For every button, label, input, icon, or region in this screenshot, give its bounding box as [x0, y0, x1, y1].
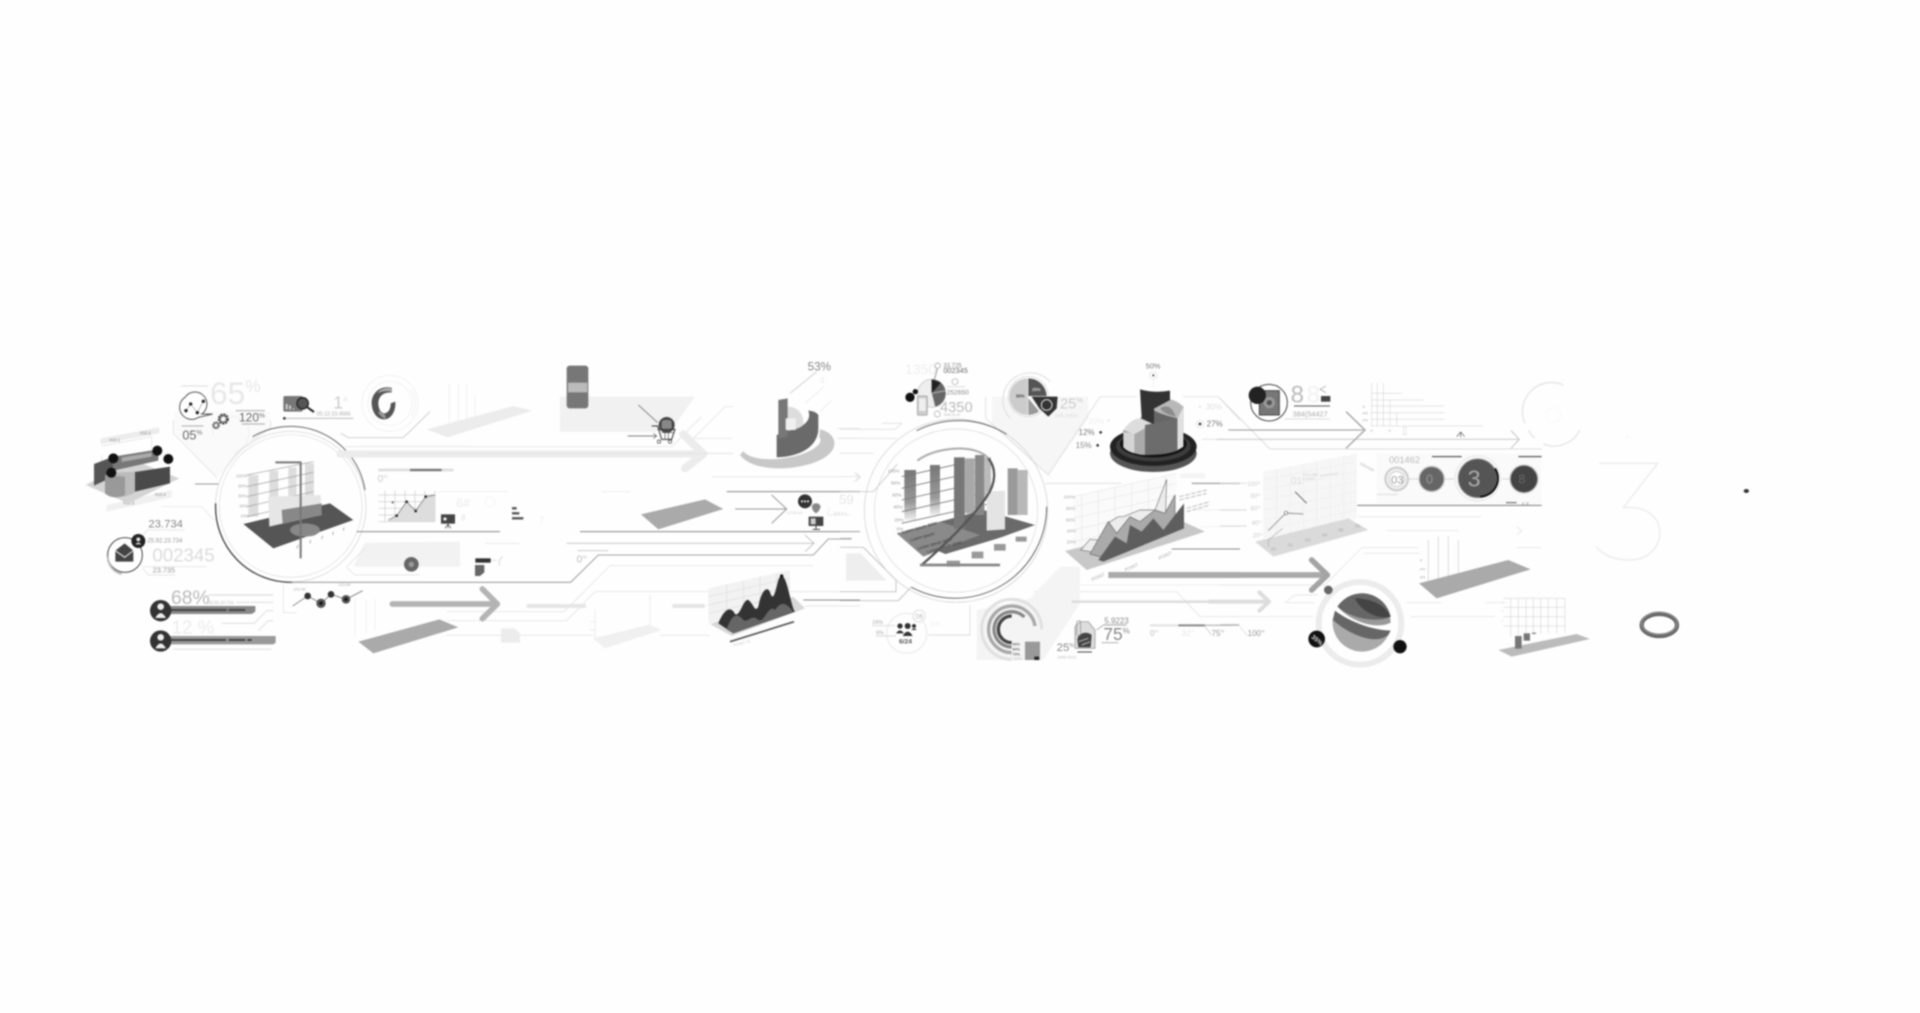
text: people counter 6/24: 24% [872, 620, 883, 626]
chart: user progress bar 12 percent [150, 611, 276, 652]
chart: 3D isometric cylinders: #10.3 [123, 501, 135, 506]
chart: 3D wall grid: 40 [1252, 521, 1258, 527]
chart: mountain area 3D [708, 570, 805, 648]
chart: 3D bars: 60% [892, 492, 902, 497]
icon: shopping cart [628, 405, 675, 443]
chart: 3D wall grid: 20 [1253, 533, 1259, 539]
arrow: connector lines centre [1033, 483, 1240, 617]
chart: 3D area chart: POINT [1091, 572, 1106, 582]
chart: 3D bars: 0% [897, 527, 903, 532]
text: 05 percent: 05 [182, 428, 196, 442]
panel: gauge background [977, 567, 1080, 660]
text: 120 percent: % [259, 412, 265, 419]
chart: dotted connector line: 123.90 [293, 587, 306, 592]
text: counter 23.734 with envelope icon: 25.92.23.734 [147, 539, 183, 545]
text: faint numbers: 8 [461, 514, 466, 523]
chart: 0 percent small [577, 551, 608, 566]
chart: radial gauge: 90% [1013, 642, 1021, 646]
chart: 3D pie on disc: 27% [1207, 420, 1223, 429]
chart: 3D area chart [1063, 473, 1210, 582]
icon: speech bubble [180, 392, 213, 419]
text: people counter 6/24: 305 [930, 623, 941, 629]
chart: 3D bars: 20% [894, 517, 904, 522]
text: 75 percent document: 5.9223 [1104, 617, 1129, 626]
chart: faint grid: #% [1363, 418, 1369, 422]
text: digit readout [1285, 381, 1330, 419]
text: 75 percent document: 3455.9223 [1057, 655, 1077, 660]
text: 75 percent document: % [1069, 643, 1074, 649]
chart: 3D area chart: POINT [1124, 562, 1139, 573]
text: digit readout: 384(54427 [1293, 409, 1328, 418]
chart: percent scale bar: % [1221, 629, 1225, 634]
arrow: bold grey arrow [392, 589, 497, 619]
chart: 0 percent bar: % [383, 474, 388, 480]
chart: 3D wall grid: 01 [1291, 476, 1303, 487]
chart: 3D wall grid: 60 [1251, 507, 1257, 513]
chart: 3D pie on disc: 10% [1088, 417, 1104, 426]
arrow: thin long arrow [1217, 431, 1519, 448]
arrow: bold arrow right [1210, 560, 1327, 590]
text: 120 percent: 120 [239, 410, 259, 424]
arrow: medium arrow [1228, 412, 1365, 448]
chart: 3D pie on disc: 15% [1076, 441, 1092, 450]
text: digit readout: 8 [1291, 381, 1304, 408]
text: counter 00.12.23.4566: 1 [333, 392, 343, 412]
text: people counter 6/24 [872, 610, 941, 653]
chart: 3D bars: Lorem ipsum dolor [917, 536, 953, 551]
chart: 3D area chart: 80% [1066, 506, 1075, 511]
panel: pentagon background [986, 397, 1240, 475]
chart: percent scale bar: % [1154, 629, 1158, 634]
chart: light isometric plane [427, 383, 532, 437]
chart: 3D wall grid: % [1257, 493, 1260, 497]
chart: pie with shield: 25 [1060, 397, 1076, 413]
chart: pie with callouts: 4350 [940, 400, 973, 416]
panel: centre left section [290, 366, 860, 653]
text: 100 percent: 100 [1248, 629, 1261, 638]
numeral: big outlined 3 [1596, 463, 1660, 560]
panel: circle counters: 001462 [1389, 455, 1420, 465]
chart: 3D bars: 40% [893, 505, 903, 510]
chart: segmented sphere: 35% [1310, 634, 1324, 648]
chart: faint grid: #% [1363, 412, 1369, 416]
chart: grey plane with axis right: #% [1420, 568, 1426, 572]
chart: pie with callouts: 252650 [947, 389, 969, 396]
chart: 3D bars: Lorem ipsum dolor [902, 520, 938, 535]
chart: 3D pie on disc: 30% [1206, 403, 1222, 412]
chart: 3D pie on disc: 50% [1146, 362, 1161, 371]
chart: plane with small bars [1498, 598, 1590, 657]
chart: faint grid: # [1371, 429, 1374, 433]
panel: centre section [840, 361, 1240, 661]
text: 75 percent document: 75 [1103, 624, 1123, 644]
text: faint numbers: 7 [539, 515, 544, 524]
chart: pie with callouts: 3456.00.00 [943, 413, 960, 417]
icon: presentation board [441, 514, 455, 528]
numeral: large 2 [917, 449, 1000, 565]
panel: circle counters [1357, 453, 1542, 507]
chart: percent scale bar: 32 [1182, 629, 1191, 638]
chart: 3D wall grid: 06 [1355, 524, 1361, 529]
text: counter 00.12.23.4566 [283, 392, 353, 420]
panel: far right section [1498, 382, 1749, 657]
icon: dashed circle [1522, 382, 1580, 446]
icon: counter 8 [1510, 465, 1538, 493]
chart: 3D pie on disc: 12% [1079, 428, 1095, 437]
chart: percent scale bar [1150, 625, 1233, 638]
icon: counter 3 [1455, 456, 1500, 501]
icon: chat and monitor [787, 492, 854, 529]
chart: faint grid: # [1389, 429, 1392, 433]
chart: grey plane with axis right [1419, 536, 1531, 598]
chart: 3D wall grid: 05 [1338, 528, 1344, 533]
panel: hatched band with speaker [345, 447, 470, 575]
panel: hatched corner [846, 553, 860, 581]
panel: head pentagon with percentages: 65 [210, 375, 245, 411]
chart: user progress bar 68 percent [150, 588, 273, 621]
chart: dark arc gauge [362, 375, 418, 431]
icon: counter 3: 3 [1468, 466, 1481, 492]
text: digit readout: 8 [1307, 381, 1320, 408]
icon: chat and monitor: 123 4 x [833, 511, 846, 516]
chart: pie with callouts: 1350 [905, 361, 936, 377]
chart: grey plane with axis right: #% [1420, 575, 1426, 579]
chart: percent scale bar: % [1191, 629, 1195, 634]
chart: 3D wall grid: % [1259, 532, 1262, 536]
chart: pie with shield: 50% [1016, 393, 1025, 398]
text: people counter 6/24: 9% [876, 631, 884, 637]
text: 100 percent: % [1261, 629, 1265, 634]
chart: 3D bars: 20% [241, 513, 249, 518]
icon: report search [283, 396, 314, 412]
arrow: pale arrow [1210, 592, 1269, 611]
chart: radial gauge: 60% [1013, 648, 1021, 652]
arrow: long connector lines with arrowheads [290, 428, 860, 635]
icon: counter 03: 03 [1391, 474, 1404, 486]
icon: ring [1642, 612, 1677, 636]
panel: main circle two with 3D bars [864, 419, 1122, 635]
chart: 3D bars: 80% [891, 481, 900, 486]
chart: 3D area chart: POINT [1158, 550, 1173, 561]
arrow: bar [1108, 566, 1240, 584]
chart: 3D bars [236, 462, 353, 558]
text: people counter 6/24: 6/24 [899, 638, 912, 645]
chart: small line chart [378, 491, 435, 522]
chart: 3D bars: 100% [888, 469, 900, 474]
chart: 3D wall grid: 03 [1305, 538, 1311, 543]
text: counter 23.734 with envelope icon: 23.734 [148, 518, 183, 530]
chart: 3D bars: Lorem ipsum [910, 531, 935, 543]
panel: left section [86, 375, 470, 652]
icon: phone [567, 366, 588, 408]
chart: radial gauge [982, 599, 1042, 661]
chart: 3D bars: 40% [239, 503, 248, 508]
panel: 3D ring chart with 53 percent [740, 360, 834, 468]
panel: circle counters: 4 8 [1522, 501, 1529, 507]
icon: envelope in circle [108, 534, 145, 574]
chart: 3D wall grid [1220, 453, 1368, 557]
chart: 3D wall grid: 02 [1288, 543, 1293, 548]
chart: grey plane with axis right: # [1420, 559, 1423, 563]
text: faint numbers: 6# [456, 496, 470, 510]
chart: faint plane chart [590, 595, 662, 648]
icon: chat and monitor: 1278216 [787, 510, 803, 515]
chart: faint grid [1363, 383, 1483, 435]
text: 05 percent: % [196, 430, 202, 437]
chart: 3D pie on disc [1076, 362, 1223, 472]
chart: user progress bar 68 percent: 25.92.23.734 [208, 600, 234, 605]
chart: grey isometric plane [641, 499, 723, 529]
chart: 3D area chart: 100% [1063, 494, 1075, 499]
chart: 0 percent bar [378, 470, 453, 485]
chart: 0 percent bar: 0 [378, 474, 383, 485]
chart: 3D wall grid: 100 [1247, 482, 1257, 488]
icon: chat and monitor: 59 [839, 492, 854, 507]
text: counter 00.12.23.4566: 00.12.23.4566 [317, 411, 351, 417]
chart: 3D bars: 80% [238, 483, 247, 488]
chart: 3D area chart: 40% [1067, 529, 1076, 534]
chart: faint grid: # [1363, 405, 1366, 409]
text: 75 percent document: % [1123, 626, 1130, 635]
chart: 3D isometric cylinders: #10.1 [109, 437, 121, 442]
chart: pie with callouts: 002345 [943, 366, 968, 375]
arrow: medium grey arrow [735, 495, 787, 523]
icon: label and document [475, 557, 503, 576]
chart: dotted connector line: 123.90 [338, 582, 351, 587]
icon: gears [213, 415, 227, 428]
panel: main circle one with 3D bars [215, 426, 366, 582]
icon: small dot [1744, 489, 1749, 493]
chart: 3D bars: Lorem ipsum dolor [926, 539, 963, 554]
chart: radial gauge: 100% [1013, 657, 1023, 661]
chart: 3D wall grid: VOLUME [1303, 473, 1319, 477]
text: 75 percent document [1057, 617, 1130, 660]
chart: percent scale bar: 0 [1150, 629, 1154, 638]
chart: pie with shield: 945.3454 [1055, 414, 1077, 420]
chart: 3D wall grid: 04 [1322, 533, 1328, 538]
chart: 3D area chart: 60% [1066, 517, 1075, 522]
chart: 3D wall grid: % [1258, 520, 1261, 524]
icon: pale paper [501, 628, 520, 643]
text: counter 23.734 with envelope icon: 23.735 [153, 566, 175, 575]
chart: 3D isometric cylinders: #10.2 [140, 431, 151, 436]
icon: counter 8: 8 [1518, 473, 1525, 487]
chart: 3D wall grid: 01 [1271, 547, 1277, 552]
text: counter 23.734 with envelope icon: 002345 [152, 545, 215, 566]
chart: mountain area 3D: POINT 01 [733, 638, 752, 648]
chart: grey plane with axis [355, 598, 458, 653]
panel: head pentagon with percentages [173, 375, 271, 477]
chart: segmented sphere [1308, 582, 1407, 665]
chart: 3D wall grid: 80 [1251, 494, 1257, 500]
text: 100 percent [1220, 625, 1265, 638]
panel: 3D ring chart with 53 percent: 53% [808, 360, 831, 373]
chart: radial gauge: 70% [1013, 653, 1021, 657]
chart: plane with small bars: 4 [1501, 599, 1504, 604]
chart: dotted connector line [283, 582, 363, 613]
chart: 3D area chart: 20% [1067, 539, 1076, 544]
chart: 0 percent small: 0 [577, 555, 582, 566]
chart: 3D bars [888, 449, 1035, 567]
chart: plane with small bars: 3 [1501, 609, 1504, 614]
icon: tiny stacked bars [512, 508, 523, 518]
text: 75 percent document: 25 [1057, 642, 1069, 654]
panel: right section [1210, 381, 1542, 665]
chart: user progress bar 12 percent: 12 % [172, 616, 214, 637]
chart: 3D bars: 60% [238, 493, 247, 498]
text: counter 00.12.23.4566: A [343, 397, 348, 404]
icon: counter 0: 0 [1426, 473, 1433, 487]
panel: 3D ring chart with 53 percent: 4 [819, 375, 825, 385]
chart: 3D wall grid: % [1257, 506, 1260, 510]
chart: percent scale bar: 75 [1212, 629, 1221, 638]
chart: pie with shield: 25% [1032, 387, 1041, 392]
icon: counter 0 [1419, 466, 1444, 492]
chart: pie with callouts [905, 361, 973, 417]
icon: tablet in circle [1249, 384, 1287, 421]
arrow: long pale arrow top [340, 407, 733, 468]
chart: user progress bar 68 percent: 68% [171, 588, 210, 609]
text: people counter 6/24: 56 [915, 613, 923, 620]
panel: hatched parallelogram [560, 397, 695, 432]
panel: head pentagon with percentages: % [245, 376, 261, 396]
icon: counter 03 [1385, 468, 1408, 490]
chart: 3D wall grid: % [1257, 481, 1260, 485]
chart: pie with shield: % [1076, 396, 1083, 405]
chart: 3D isometric cylinders: #10.4 [155, 492, 166, 497]
chart: 3D isometric cylinders [86, 427, 179, 512]
chart: pie with callouts: 33,725 [943, 363, 962, 369]
chart: plane with small bars: 2 [1501, 618, 1504, 623]
text: counter 23.734 with envelope icon [108, 518, 215, 575]
chart: 3D wall grid: CHART [1303, 477, 1316, 481]
chart: 0 percent small: % [582, 555, 587, 561]
chart: 3D bars: 100% [236, 473, 247, 478]
text: faint numbers [438, 492, 630, 524]
chart: pie with shield [1003, 373, 1083, 420]
